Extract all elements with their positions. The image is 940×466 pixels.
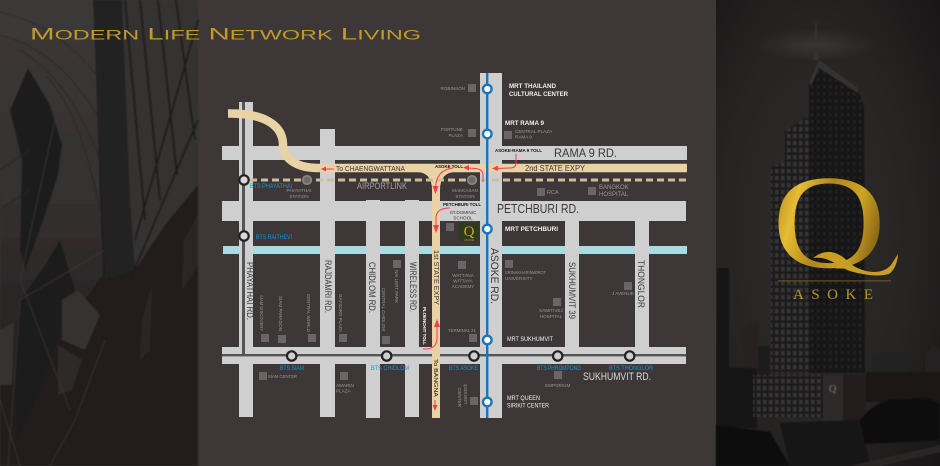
- landmark labels: SAMITIVEJ: [539, 308, 563, 313]
- Q Asoke small site logo: Q: [464, 224, 475, 240]
- road name labels: WIRELESS RD.: [408, 262, 418, 312]
- road name labels: CHIDLOM RD.: [367, 262, 377, 313]
- landmark labels: GAYSORN PLAZA: [338, 294, 343, 333]
- Q Asoke gold logo: ASOKE: [793, 287, 873, 303]
- BTS stations: BTS SIAM: [280, 366, 304, 372]
- foreground trees and road: [716, 398, 940, 466]
- road name labels: RAJDAMRI RD.: [323, 260, 333, 313]
- landmark labels: HOSPITAL: [599, 192, 629, 198]
- roads grid: [222, 73, 687, 418]
- road name labels: To CHAENGWATTANA: [336, 164, 405, 173]
- skyline silhouettes: [717, 268, 940, 428]
- Q Asoke gold logo: Q: [772, 147, 886, 296]
- MRT stations: MRT PETCHBURI: [505, 226, 558, 233]
- road name labels: SUKHUMVIT 39: [567, 262, 577, 319]
- tower body: Q: [829, 384, 837, 395]
- toll labels: [422, 148, 542, 345]
- Airport Link stations: [303, 176, 476, 184]
- road name labels: AIRPORTLINK: [357, 181, 407, 191]
- landmark labels: RCA: [547, 190, 559, 196]
- toll labels: PETCHBURI TOLL: [443, 202, 481, 207]
- landmark labels: RAMA 9: [515, 134, 532, 140]
- road name labels: SUKHUMVIT RD.: [583, 371, 651, 383]
- landmark labels: CENTER: [457, 388, 462, 408]
- landmark labels: ST.DOMINIC: [450, 210, 477, 215]
- expressway network: [228, 113, 687, 418]
- MRT stations: SIRIKIT CENTER: [507, 402, 549, 410]
- location map: [222, 73, 687, 418]
- MRT stations: MRT THAILAND: [509, 83, 557, 90]
- road name labels: THONGLOR: [636, 260, 646, 308]
- Q Asoke small site logo: [459, 223, 479, 242]
- landmark labels: STATION: [289, 194, 309, 199]
- landmark labels: HOSPITAL: [540, 314, 563, 319]
- landmark labels: WATTANA: [452, 273, 475, 278]
- landmark labels: PHAYATHAI: [286, 188, 312, 193]
- MRT blue line: [486, 73, 488, 418]
- road name labels: 1st STATE EXPY: [432, 250, 441, 305]
- landmark labels: BANGKOK: [599, 185, 629, 191]
- landmark labels: NAI LERT PARK: [394, 270, 399, 304]
- landmark squares: [259, 84, 632, 405]
- right photo panel: Q Asoke tower at night: [716, 0, 940, 466]
- toll labels: PLOENCHIT TOLL: [422, 307, 427, 345]
- road name labels: ASOKE RD.: [488, 248, 500, 304]
- landmark labels: QUEEN SIRIKIT: [463, 384, 468, 404]
- landmark labels: ROBINSON: [440, 86, 465, 91]
- BTS stations: [239, 175, 654, 372]
- landmark labels: CENTRAL CHIDLOM: [381, 288, 386, 331]
- landmark labels: CENTRAL PLAZA: [515, 129, 553, 134]
- MRT stations: [483, 83, 569, 410]
- MRT stations: MRT QUEEN: [507, 395, 540, 402]
- landmark labels: SIAM PARAGON: [278, 296, 283, 331]
- BTS stations: BTS RAITHEVI: [256, 235, 292, 241]
- Airport Link dashed line: [250, 178, 686, 182]
- road name labels: PHAYATHAI RD.: [245, 262, 255, 320]
- landmark labels: MAKKASAN: [452, 188, 478, 193]
- landmark labels: FORTUNE: [441, 127, 463, 132]
- landmark labels: AMARIN: [336, 383, 354, 388]
- landmark labels: ACADEMY: [452, 284, 474, 289]
- landmark labels: STATION: [455, 194, 475, 199]
- left photo panel: glass tower abstract: [0, 0, 198, 466]
- landmark labels: J AVENUE: [612, 291, 634, 296]
- MRT stations: CULTURAL CENTER: [509, 91, 569, 98]
- BTS rail lines: [222, 102, 686, 356]
- road name labels: PETCHBURI RD.: [497, 201, 579, 216]
- MRT stations: MRT SUKHUMVIT: [507, 336, 553, 343]
- landmark labels: UNIVERSITY: [505, 276, 533, 281]
- central map background panel: [198, 0, 716, 466]
- toll labels: ASOKE-RAMA 9 TOLL: [495, 148, 542, 153]
- Q Asoke small site logo: ASOKE: [464, 238, 474, 242]
- BTS stations: BTS THONGLOR: [609, 366, 654, 372]
- landmark labels: SCHOOL: [453, 216, 473, 220]
- landmark labels: CENTRAL WORLD: [306, 294, 311, 333]
- BTS stations: BTS PHROMPONG: [537, 366, 581, 372]
- landmark labels: SIAM DISCOVERY: [259, 295, 264, 331]
- road name labels: [245, 148, 651, 397]
- river canal band: [223, 246, 687, 254]
- BTS stations: BTS PHAYATHAI: [250, 184, 292, 190]
- MRT stations: MRT RAMA 9: [505, 120, 545, 127]
- Q Asoke gold logo: [778, 178, 898, 299]
- BTS stations: BTS ASOKE: [449, 366, 478, 372]
- road name labels: 2nd STATE EXPY: [525, 164, 586, 173]
- landmark labels: TERMINAL 21: [448, 328, 476, 333]
- landmark labels: WITTAYA: [453, 278, 474, 284]
- BTS stations: BTS CHIDLOM: [371, 366, 409, 372]
- red direction arrows: [321, 154, 516, 411]
- landmark labels: EMPORIUM: [545, 383, 570, 388]
- landmark labels: SIAM CENTER: [268, 374, 298, 379]
- landmark labels: PLAZA: [448, 133, 464, 138]
- landmark labels: [259, 86, 634, 408]
- title: M ODERN L IFE N ETWORK L IVING: [30, 24, 421, 44]
- tower body: [753, 23, 865, 423]
- landmark labels: SRINAKHARINWIROT: [505, 270, 546, 275]
- road name labels: RAMA 9 RD.: [554, 148, 617, 160]
- landmark labels: PLAZA: [336, 388, 351, 394]
- road name labels: To BANGNA: [432, 359, 438, 397]
- toll labels: ASOKE TOLL: [435, 164, 463, 169]
